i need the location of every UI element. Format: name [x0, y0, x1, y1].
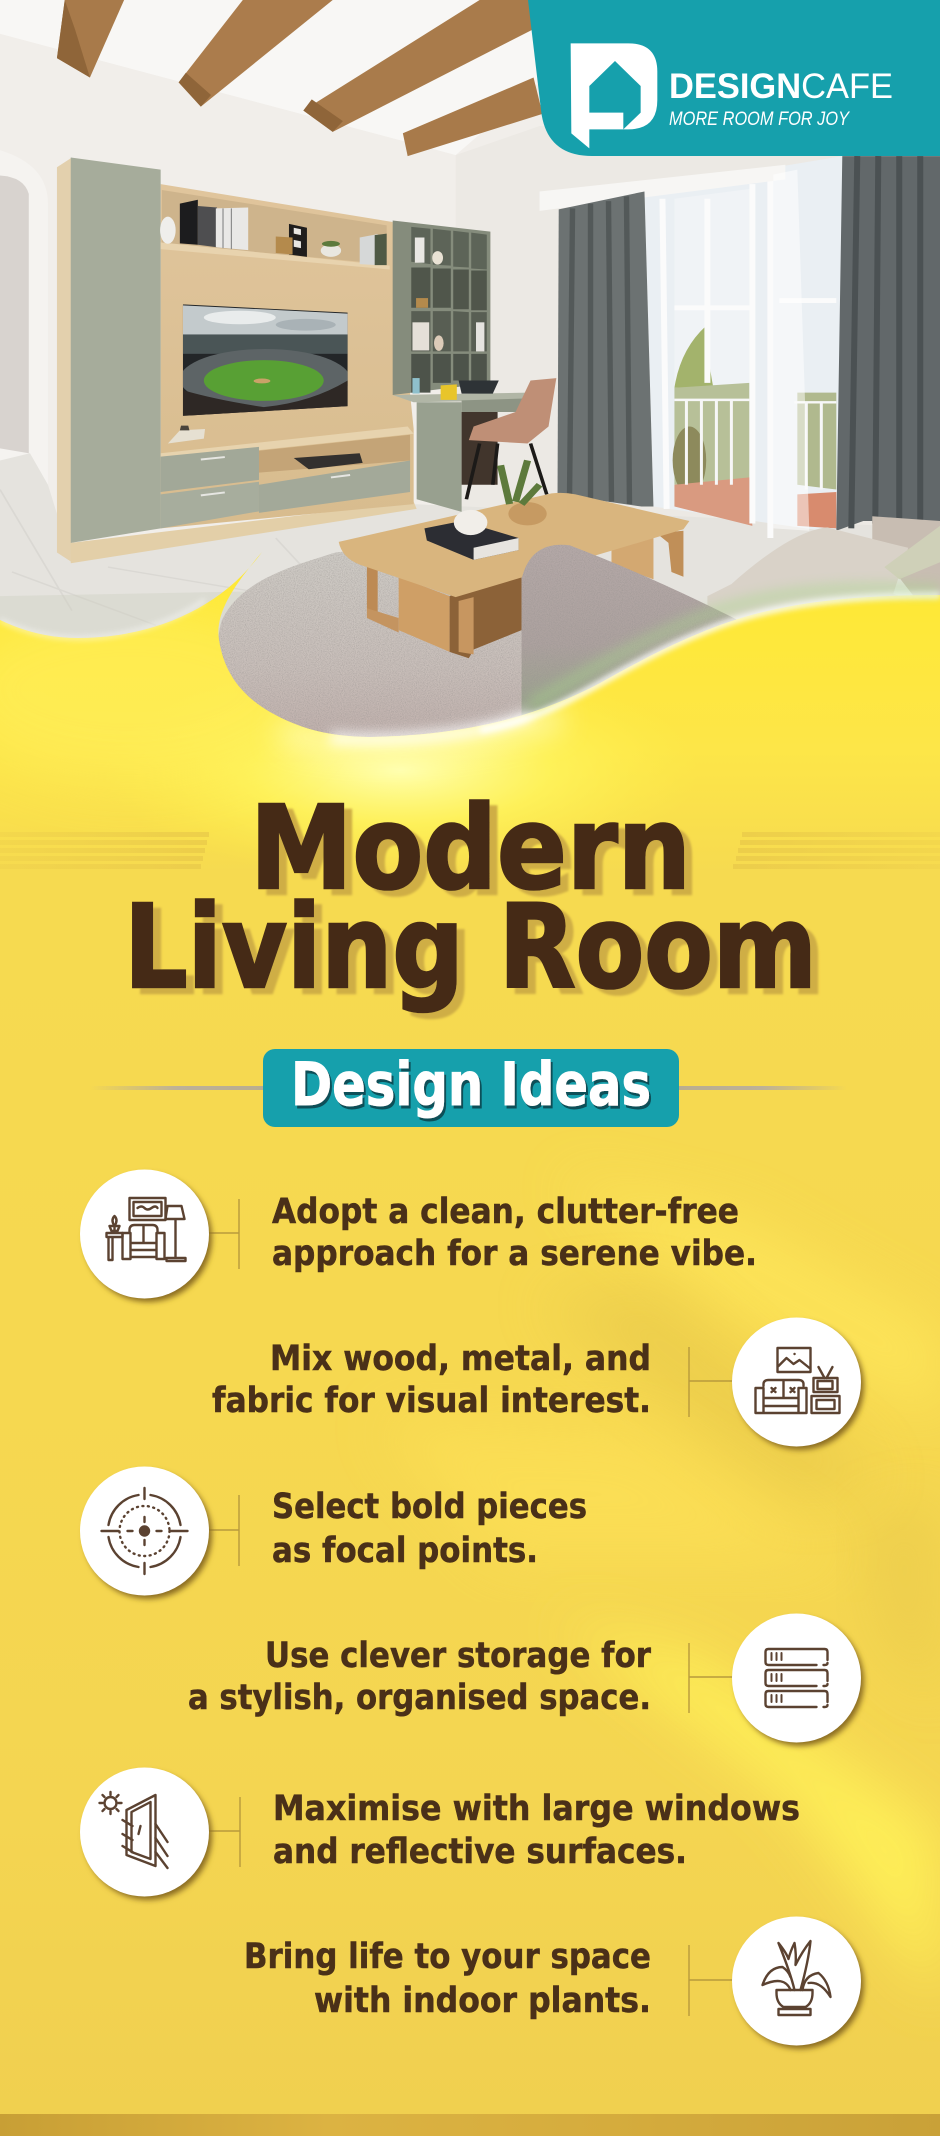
- item 3: [80, 1466, 587, 1599]
- logo badge: [528, 0, 940, 156]
- icon: sofa and lamp: [106, 1198, 186, 1261]
- icon circle: [736, 1618, 864, 1746]
- window and balcony: [540, 156, 842, 538]
- icon: window and sun: [100, 1792, 168, 1868]
- marble floor: [0, 453, 940, 760]
- icon: potted plant: [762, 1941, 830, 2015]
- text: [212, 1339, 651, 1421]
- connector: [209, 1199, 239, 1269]
- item 1: [80, 1170, 757, 1302]
- bookshelf: [393, 221, 490, 395]
- text: [244, 1937, 651, 2021]
- text: Use clever storage for: [265, 1636, 652, 1676]
- icon: target: [102, 1488, 188, 1574]
- title: Living Room: [124, 881, 817, 1015]
- text: [272, 1487, 587, 1571]
- title: Modern: [250, 782, 691, 916]
- icon: storage shelves: [766, 1649, 828, 1707]
- subtitle rule right: [677, 1086, 847, 1090]
- sofa: [707, 516, 940, 679]
- chair: [466, 378, 556, 499]
- text: approach for a serene vibe.: [272, 1234, 757, 1274]
- connector: [209, 1495, 239, 1566]
- text: and reflective surfaces.: [273, 1832, 687, 1872]
- icon circle: [84, 1471, 212, 1599]
- text: Select bold pieces: [272, 1487, 587, 1527]
- item 4: [188, 1614, 864, 1746]
- icon circle: [736, 1322, 864, 1450]
- icon circle: [736, 1921, 864, 2049]
- archway: [0, 150, 48, 490]
- subtitle rule left: [90, 1086, 265, 1090]
- subtitle pill: Design Ideas: [291, 1050, 651, 1120]
- curtains: [558, 156, 940, 531]
- text: [272, 1192, 757, 1274]
- connector: [209, 1797, 240, 1867]
- title: [124, 782, 817, 1015]
- room photo: [0, 0, 940, 776]
- text: with indoor plants.: [314, 1981, 651, 2021]
- item 6: [244, 1916, 864, 2049]
- text: a stylish, organised space.: [188, 1678, 651, 1718]
- text: as focal points.: [272, 1531, 538, 1571]
- ceiling beams: [57, 0, 543, 156]
- item 2: [212, 1318, 864, 1450]
- wordmark: DESIGNCAFE: [669, 67, 893, 106]
- icon circle: [84, 1772, 212, 1900]
- tv console: [161, 426, 414, 528]
- icon circle: [84, 1174, 212, 1302]
- coffee table: [339, 460, 689, 658]
- text: [188, 1636, 652, 1718]
- icon: sofa, picture and tv: [756, 1348, 840, 1413]
- item 5: [80, 1768, 800, 1900]
- connector: [689, 1945, 732, 2016]
- text: [273, 1789, 800, 1872]
- bottom band: [0, 2114, 940, 2136]
- text: fabric for visual interest.: [212, 1381, 651, 1421]
- wall unit: [57, 158, 417, 563]
- logo mark: [571, 43, 657, 148]
- yellow wave background: [0, 552, 940, 1970]
- connector: [689, 1643, 732, 1713]
- television: [180, 303, 351, 419]
- rug: [218, 546, 672, 748]
- sofa throw: [522, 545, 776, 727]
- text: Mix wood, metal, and: [270, 1339, 651, 1379]
- text: Adopt a clean, clutter-free: [272, 1192, 739, 1232]
- tagline: MORE ROOM FOR JOY: [669, 109, 850, 130]
- text: Maximise with large windows: [273, 1789, 800, 1829]
- desk: [393, 380, 528, 512]
- text: Bring life to your space: [244, 1937, 651, 1977]
- title decorative stripes: [0, 832, 940, 869]
- connector: [689, 1347, 732, 1417]
